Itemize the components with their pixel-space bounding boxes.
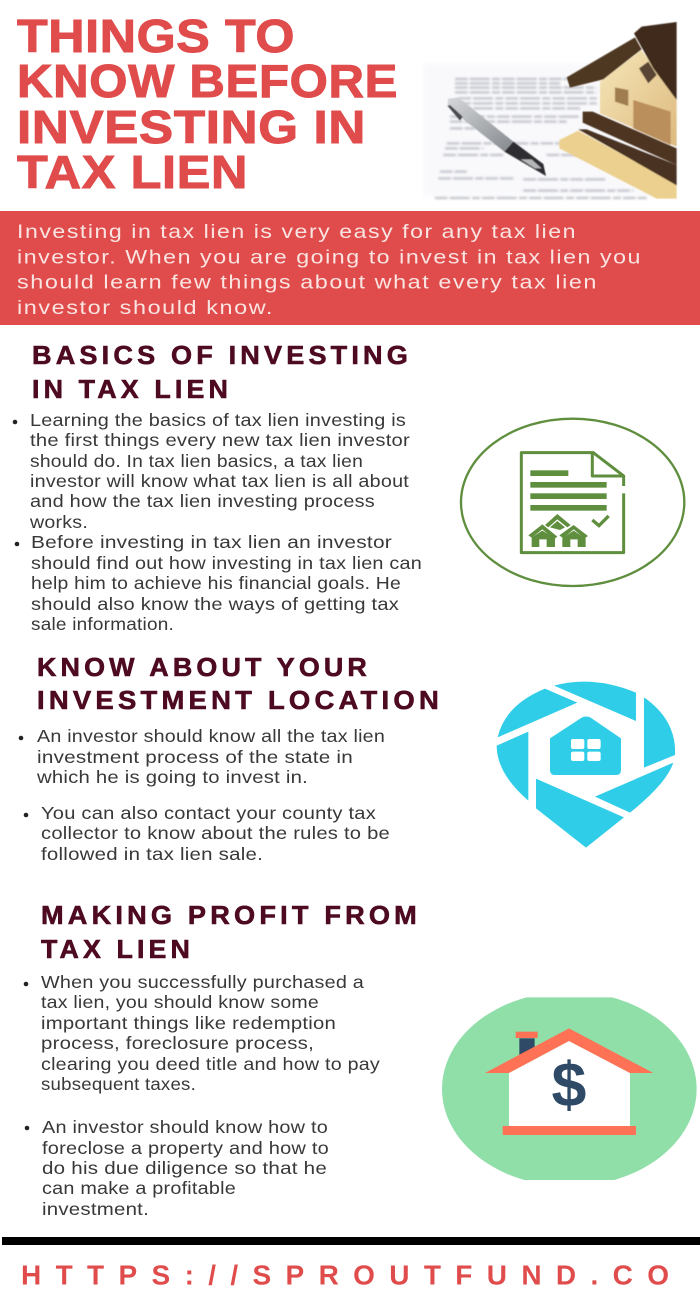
text block: basics bullet one: Learning the basics of tax lien investing is	[30, 410, 406, 430]
text block: profit bullet one: tax lien, you should know some	[41, 992, 319, 1012]
text block: profit bullet one: process, foreclosure process,	[41, 1033, 314, 1053]
intro banner: investor. When you are going to invest in tax lien you	[17, 246, 642, 268]
text block: basics bullet two	[15, 532, 422, 634]
text block: location bullet two	[24, 803, 390, 864]
icon: document with houses in green ellipse	[461, 419, 684, 586]
footer url: HTTPS://SPROUTFUND.CO	[21, 1260, 669, 1290]
heading: making profit from tax lien: TAX LIEN	[41, 934, 194, 964]
text block: basics bullet one: works.	[29, 512, 88, 532]
icon: house with dollar sign on green circle	[442, 992, 697, 1186]
heading: basics of investing: IN TAX LIEN	[32, 374, 232, 404]
text block: location bullet two: You can also contact your county tax	[41, 803, 376, 823]
heading: making profit from tax lien	[41, 900, 421, 964]
title: INVESTING IN	[17, 101, 366, 153]
divider bar	[2, 1237, 700, 1245]
text block: basics bullet two: Before investing in tax lien an investor	[31, 532, 392, 552]
heading: know about your investment location	[37, 652, 443, 715]
icon: house with dollar sign on green circle: $	[552, 1050, 586, 1120]
title: THINGS TO	[17, 10, 295, 62]
text block: profit bullet two: do his due diligence so that he	[42, 1158, 327, 1178]
heading: making profit from tax lien: MAKING PROFIT FROM	[41, 900, 421, 930]
icon: blue location pin with house	[497, 682, 675, 848]
heading: basics of investing	[32, 340, 412, 404]
text block: location bullet one: which he is going to invest in.	[36, 767, 308, 787]
text block: profit bullet one	[24, 972, 380, 1094]
text block: profit bullet two: investment.	[42, 1199, 149, 1219]
text block: basics bullet two: sale information.	[31, 614, 174, 634]
text block: basics bullet two: should find out how investing in tax lien can	[31, 553, 422, 573]
text block: location bullet one	[19, 726, 385, 787]
title: TAX LIEN	[17, 146, 248, 198]
text block: location bullet one: investment process of the state in	[37, 747, 353, 767]
title	[17, 10, 398, 198]
text block: location bullet two: followed in tax lien sale.	[41, 844, 263, 864]
text block: profit bullet two	[25, 1117, 329, 1219]
text block: basics bullet one: the first things every new tax lien investor	[30, 430, 410, 450]
text block: basics bullet one: investor will know what tax lien is all about	[30, 471, 409, 491]
text block: basics bullet one: and how the tax lien investing process	[30, 491, 375, 511]
text block: basics bullet one: should do. In tax lien basics, a tax lien	[30, 451, 363, 471]
photo: contract, pen and wooden house	[423, 22, 677, 199]
text block: basics bullet two: should also know the ways of getting tax	[31, 594, 399, 614]
text block: profit bullet two: foreclose a property and how to	[42, 1138, 329, 1158]
heading: know about your investment location: INVESTMENT LOCATION	[37, 685, 443, 715]
text block: basics bullet one	[13, 410, 410, 532]
intro banner: should learn few things about what every tax lien	[17, 272, 598, 294]
text block: profit bullet one: important things like redemption	[41, 1013, 336, 1033]
text block: profit bullet one: clearing you deed title and how to pay	[41, 1054, 380, 1074]
text block: profit bullet one: When you successfully purchased a	[41, 972, 364, 992]
text block: location bullet one: An investor should know all the tax lien	[37, 726, 385, 746]
heading: basics of investing: BASICS OF INVESTING	[32, 340, 412, 370]
text block: profit bullet two: can make a profitable	[42, 1178, 236, 1198]
text block: profit bullet one: subsequent taxes.	[41, 1074, 196, 1094]
intro banner: investor should know.	[17, 297, 274, 319]
intro banner: Investing in tax lien is very easy for any tax lien	[17, 221, 577, 243]
text block: basics bullet two: help him to achieve his financial goals. He	[31, 573, 401, 593]
text block: profit bullet two: An investor should know how to	[42, 1117, 328, 1137]
heading: know about your investment location: KNOW ABOUT YOUR	[37, 652, 371, 682]
title: KNOW BEFORE	[17, 55, 398, 107]
intro banner	[0, 211, 700, 325]
text block: location bullet two: collector to know about the rules to be	[41, 823, 390, 843]
